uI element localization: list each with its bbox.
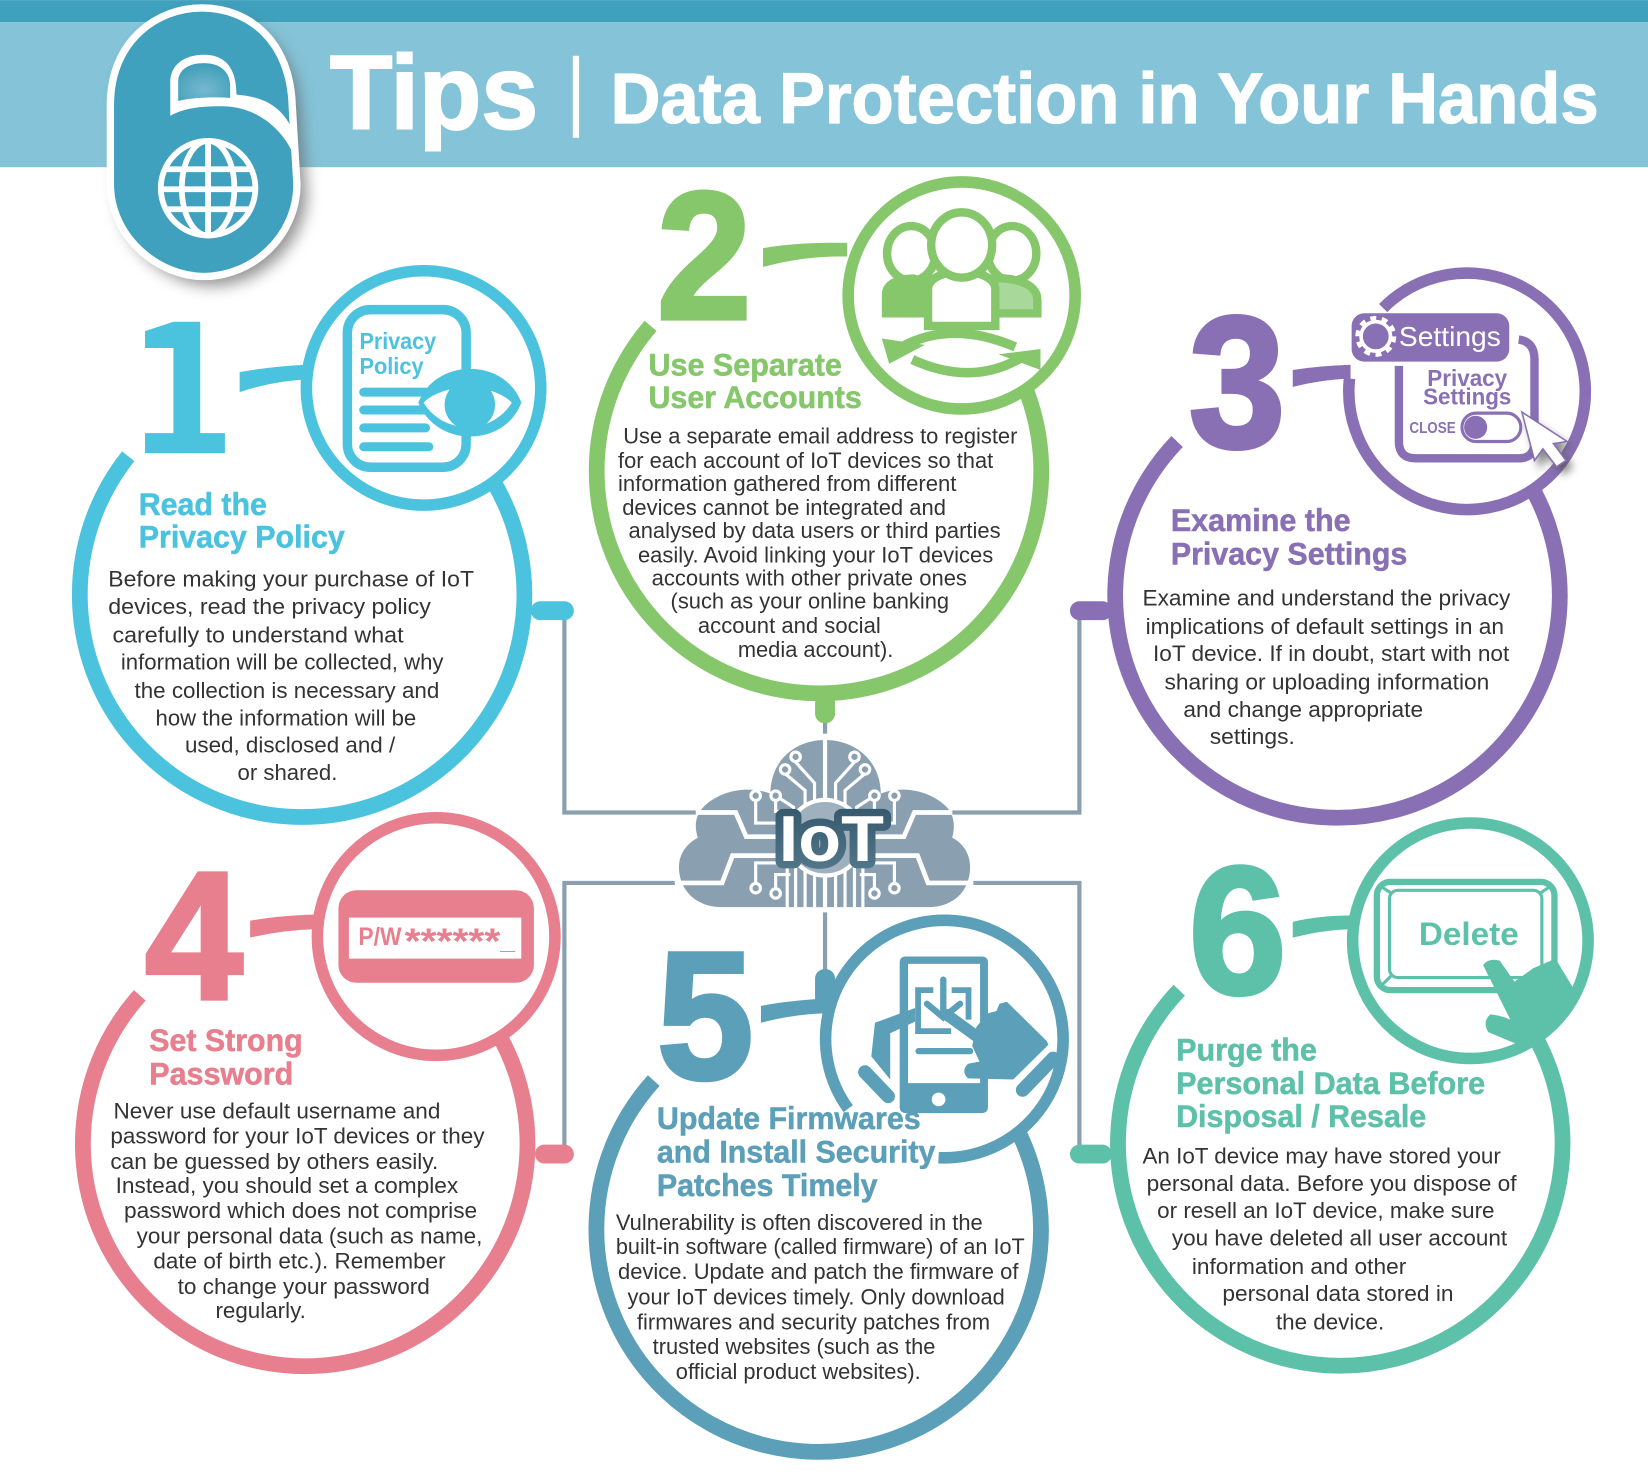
icon: privacy settings window with toggle: CLOSE [1409, 420, 1456, 437]
heading 6 [1176, 1032, 1485, 1134]
icon: policy document with eye [306, 271, 541, 505]
number 1 [145, 322, 225, 454]
body text 4: Never use default username and [114, 1098, 440, 1123]
icon: privacy settings window with toggle: Privacy [1427, 365, 1507, 391]
number 5: 5 [657, 913, 754, 1117]
body text 5: official product websites). [676, 1359, 921, 1384]
body text 4: your personal data (such as name, [137, 1223, 482, 1248]
body text 6: personal data. Before you dispose of [1147, 1171, 1518, 1196]
icon: three users with swap arrows [848, 182, 1075, 409]
panel: tip 5 update firmwares and patches [596, 913, 1063, 1452]
header band [0, 0, 1648, 167]
body text 2 [618, 424, 1017, 662]
body text 6: personal data stored in [1222, 1281, 1454, 1306]
heading 1: Privacy Policy [139, 519, 345, 555]
body text 6: An IoT device may have stored your [1142, 1144, 1501, 1169]
panel: tip 1 read the privacy policy [80, 271, 574, 817]
connector 1 [240, 365, 305, 392]
body text 1: devices, read the privacy policy [108, 594, 431, 619]
heading 2: User Accounts [648, 379, 862, 415]
body text 5: Vulnerability is often discovered in the [616, 1210, 983, 1235]
number 1: 1 [176, 337, 199, 454]
panel: tip 6 purge the personal data [1070, 823, 1588, 1366]
body text 6: the device. [1276, 1310, 1384, 1335]
heading 5: and Install Security [657, 1134, 936, 1170]
title [330, 34, 1599, 151]
connector 5 [761, 999, 825, 1023]
body text 3: settings. [1210, 724, 1295, 749]
heading 5 [657, 1100, 936, 1203]
connector 2 [763, 243, 847, 267]
icon: policy document with eye: Privacy [359, 328, 436, 354]
icon: phone with download and hands [815, 920, 1063, 1158]
body text 6: or resell an IoT device, make sure [1157, 1198, 1495, 1223]
body text 5: built-in software (called firmware) of an IoT [616, 1234, 1025, 1259]
icon: privacy settings window with toggle: Settings [1423, 384, 1511, 410]
icon: padlock shaped 6 with globe [110, 8, 307, 286]
body text 4: password for your IoT devices or they [110, 1124, 485, 1149]
heading 6: Purge the [1176, 1032, 1317, 1068]
heading 4 [149, 1022, 303, 1092]
heading 3 [1171, 502, 1407, 571]
body text 3: sharing or uploading information [1165, 670, 1489, 695]
number 4: 4 [145, 834, 243, 1038]
body text 2: accounts with other private ones [652, 565, 967, 590]
body text 3: implications of default settings in an [1146, 614, 1504, 639]
body text 2: media account). [738, 637, 893, 662]
connector 6 [1293, 916, 1351, 938]
body text 1: Before making your purchase of IoT [108, 567, 474, 592]
body text 2: for each account of IoT devices so that [618, 448, 993, 473]
panel: tip 3 examine the privacy settings [1070, 273, 1585, 818]
body text 2: easily. Avoid linking your IoT devices [638, 542, 993, 567]
body text 5: your IoT devices timely. Only download [627, 1284, 1005, 1309]
body text 6 [1142, 1144, 1518, 1335]
body text 4: date of birth etc.). Remember [153, 1249, 446, 1274]
body text 2: analysed by data users or third parties [629, 518, 1001, 543]
icon: password field: ****** [405, 921, 500, 961]
body text 5: firmwares and security patches from [637, 1310, 990, 1335]
body text 1: the collection is necessary and [135, 678, 439, 703]
heading 4: Password [149, 1056, 293, 1092]
body text 6: information and other [1192, 1254, 1406, 1279]
heading 2: Use Separate [648, 346, 842, 382]
connector 3 [1293, 365, 1351, 387]
heading 1: Read the [139, 486, 267, 522]
body text 5: device. Update and patch the firmware of [618, 1259, 1019, 1284]
icon: privacy settings window with toggle: Settings [1399, 321, 1501, 352]
icon: privacy settings window with toggle [1349, 273, 1585, 510]
body text 2: information gathered from different [618, 471, 956, 496]
icon: delete key with pointing hand [1353, 823, 1588, 1058]
body text 1: used, disclosed and / [185, 733, 396, 758]
body text 5 [616, 1210, 1025, 1384]
body text 3: and change appropriate [1183, 697, 1423, 722]
body text 2: (such as your online banking [671, 589, 949, 614]
connector 4 [250, 914, 315, 938]
heading 6: Personal Data Before [1176, 1065, 1485, 1101]
icon: password field: P/W [358, 923, 402, 951]
heading 3: Examine the [1171, 502, 1351, 538]
body text 4: to change your password [178, 1274, 430, 1299]
panel: tip 4 set strong password [83, 818, 574, 1366]
body text 2: Use a separate email address to register [623, 424, 1017, 449]
heading 2 [648, 346, 862, 415]
body text 1: or shared. [238, 760, 337, 785]
body text 1: carefully to understand what [112, 622, 404, 647]
number 6: 6 [1189, 828, 1286, 1032]
heading 5: Update Firmwares [657, 1100, 921, 1136]
body text 1: how the information will be [156, 705, 416, 730]
body text 4: can be guessed by others easily. [110, 1149, 438, 1174]
connector lines to IoT cloud [564, 611, 1079, 1154]
body text 1: information will be collected, why [121, 650, 444, 675]
icon: IoT cloud: IoT [779, 802, 884, 875]
body text 4: password which does not comprise [124, 1198, 477, 1223]
heading 5: Patches Timely [657, 1167, 878, 1203]
title: Tips [330, 34, 538, 151]
body text 2: account and social [698, 613, 881, 638]
heading 3: Privacy Settings [1171, 535, 1407, 571]
body text 4 [110, 1098, 485, 1323]
body text 3 [1142, 585, 1510, 749]
body text 1 [108, 567, 474, 785]
icon: IoT cloud [677, 740, 973, 907]
title: Data Protection in Your Hands [611, 59, 1599, 139]
icon: password field: _ [499, 927, 516, 955]
body text 3: Examine and understand the privacy [1142, 585, 1510, 610]
panel: tip 2 use separate user accounts [597, 154, 1075, 723]
number 3: 3 [1189, 278, 1285, 487]
body text 5: trusted websites (such as the [653, 1334, 935, 1359]
icon: password field [317, 818, 555, 1055]
heading 6: Disposal / Resale [1176, 1098, 1426, 1134]
heading 1 [139, 486, 345, 555]
body text 4: Instead, you should set a complex [116, 1173, 458, 1198]
body text 6: you have deleted all user account [1172, 1226, 1507, 1251]
body text 2: devices cannot be integrated and [622, 495, 946, 520]
body text 4: regularly. [215, 1298, 306, 1323]
body text 3: IoT device. If in doubt, start with not [1153, 641, 1509, 666]
icon: delete key with pointing hand: Delete [1419, 916, 1519, 952]
icon: policy document with eye: Policy [359, 353, 424, 379]
heading 4: Set Strong [149, 1022, 303, 1058]
number 2: 2 [657, 154, 751, 358]
